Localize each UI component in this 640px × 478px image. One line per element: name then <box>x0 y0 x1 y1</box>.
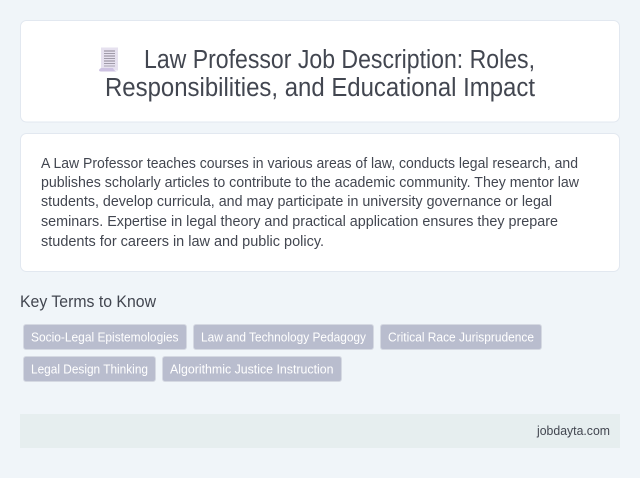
panel: description <box>20 134 620 272</box>
tag: Legal Design Thinking <box>24 356 156 382</box>
tag: Critical Race Jurisprudence: Critical Race Jurisprudence <box>388 330 534 344</box>
text block: description: students, develop curricula, and may participate in university governance or legal <box>41 193 552 210</box>
tag: Legal Design Thinking: Legal Design Thinking <box>31 362 148 376</box>
tag: Law and Technology Pedagogy: Law and Technology Pedagogy <box>201 330 367 344</box>
tag: Algorithmic Justice Instruction <box>162 356 342 382</box>
title: Responsibilities, and Educational Impact <box>105 74 535 102</box>
footer <box>20 414 620 448</box>
text block: description: seminars. Expertise in legal theory and practical application ensures they prepare <box>41 213 558 230</box>
title: Law Professor Job Description: Roles, <box>144 46 535 74</box>
text block: description: A Law Professor teaches courses in various areas of law, conducts legal research, and <box>41 155 578 172</box>
text block: description: students for careers in law and public policy. <box>41 233 324 250</box>
tag: Law and Technology Pedagogy <box>194 324 374 350</box>
tags: key terms <box>24 324 542 382</box>
text block: description <box>41 155 579 250</box>
title <box>105 46 535 102</box>
icon: scroll document <box>99 48 118 72</box>
footer: jobdayta.com <box>536 423 610 438</box>
tag: Socio-Legal Epistemologies: Socio-Legal Epistemologies <box>31 330 178 344</box>
text block: description: publishes scholarly articles to contribute to the academic community. They mentor law <box>41 174 579 191</box>
tag: Critical Race Jurisprudence <box>380 324 542 350</box>
panel: title card <box>20 20 620 122</box>
heading: key terms: Key Terms to Know <box>20 293 156 311</box>
tag: Algorithmic Justice Instruction: Algorithmic Justice Instruction <box>170 362 334 376</box>
tag: Socio-Legal Epistemologies <box>24 324 186 350</box>
